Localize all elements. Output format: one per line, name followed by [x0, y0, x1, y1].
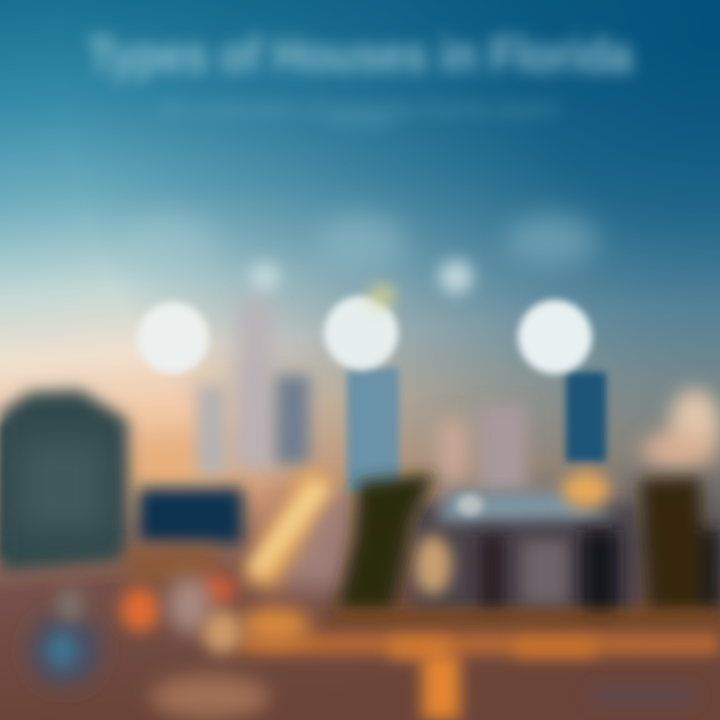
tower: faint	[438, 420, 468, 480]
tower: mid right	[478, 405, 526, 490]
cloud right	[642, 389, 720, 468]
left building	[0, 390, 128, 572]
tower: centre blue	[347, 368, 399, 493]
title: Types of Houses in Florida	[88, 27, 634, 83]
small glowing dots	[250, 260, 473, 294]
tower: tall centre left	[232, 300, 282, 470]
house roof	[435, 492, 620, 522]
large white circles	[137, 296, 592, 374]
subtitle	[160, 96, 560, 133]
bottom right faint label	[590, 688, 695, 704]
circle: centre	[324, 296, 398, 370]
lit window	[414, 535, 452, 595]
tower: right dark	[276, 375, 310, 465]
circle: right	[518, 300, 592, 374]
warm sun glow	[562, 472, 610, 508]
orange street horizontal	[202, 607, 720, 658]
left road details	[29, 577, 270, 719]
palm tree right	[640, 478, 720, 612]
top row of faint circles	[122, 214, 598, 275]
ground accents	[130, 440, 350, 590]
tower: navy right	[566, 372, 606, 462]
brown block under navy	[125, 548, 215, 583]
circle: left	[137, 302, 209, 374]
diagonal road glow	[200, 470, 335, 606]
subtitle: Florida	[324, 108, 392, 133]
tower: left small	[197, 385, 227, 475]
dark blue block	[138, 488, 243, 544]
pillars	[480, 535, 504, 610]
subtitle: An overview of popular home styles	[160, 96, 560, 123]
house	[414, 492, 635, 615]
palm tree left	[338, 474, 435, 610]
orange street vertical	[422, 655, 460, 720]
skyline towers	[197, 300, 606, 493]
yellow accent	[369, 284, 395, 308]
